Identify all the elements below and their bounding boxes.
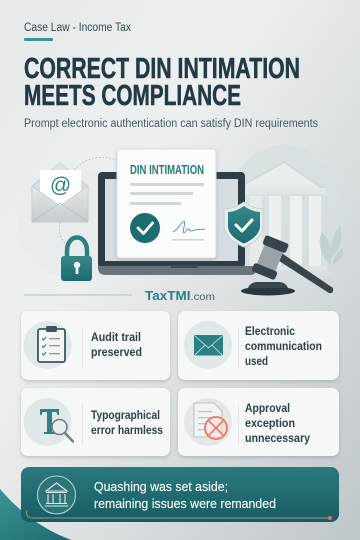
icon: plant bbox=[320, 226, 343, 265]
backdrop blobs bbox=[224, 145, 344, 291]
card text: Approval bbox=[245, 401, 290, 415]
card: audit trail bbox=[21, 311, 170, 380]
accent bar bbox=[24, 38, 53, 41]
subtitle: Prompt electronic authentication can satisfy DIN requirements bbox=[24, 118, 318, 130]
icon: mail bbox=[184, 321, 232, 369]
card text bbox=[245, 401, 310, 445]
banner text bbox=[94, 479, 276, 511]
icon: courthouse bbox=[238, 162, 332, 276]
icon: dotted connectors bbox=[59, 157, 117, 246]
category label: Case Law - Income Tax bbox=[24, 22, 131, 34]
card text: used bbox=[245, 354, 268, 368]
banner text: Quashing was set aside; bbox=[94, 479, 228, 494]
banner text: remaining issues were remanded bbox=[94, 496, 276, 511]
bottom-left teal corner bbox=[0, 489, 72, 540]
icon: clipboard bbox=[24, 321, 72, 369]
card text: communication bbox=[245, 339, 322, 353]
card text: Typographical bbox=[91, 408, 160, 422]
icon: courthouse badge bbox=[38, 476, 76, 514]
card text: Audit trail bbox=[91, 330, 141, 344]
card text: error harmless bbox=[91, 423, 163, 437]
card text: unnecessary bbox=[245, 431, 310, 445]
signature bbox=[173, 221, 205, 233]
card: approval exception bbox=[178, 388, 339, 456]
card: typographical error bbox=[21, 388, 170, 456]
brand: TaxTMI.com: TaxTMI .com bbox=[145, 289, 215, 303]
conclusion banner bbox=[21, 467, 339, 522]
icon: document with cross bbox=[184, 398, 232, 446]
document heading: DIN INTIMATION bbox=[130, 163, 204, 177]
icon: shield bbox=[224, 202, 263, 247]
icon: check badge bbox=[130, 213, 160, 243]
card text: exception bbox=[245, 416, 295, 430]
hero illustration bbox=[18, 145, 344, 296]
icon: padlock bbox=[61, 238, 92, 281]
icon: letter T with magnifier bbox=[24, 398, 73, 446]
icon: gavel bbox=[241, 235, 333, 296]
icon: envelope with @ letter: @ bbox=[50, 174, 71, 197]
brand divider line bbox=[24, 294, 132, 296]
card text: preserved bbox=[91, 345, 142, 359]
card: electronic communication bbox=[178, 311, 339, 380]
icon: envelope with @ letter bbox=[32, 163, 88, 222]
card text bbox=[91, 408, 163, 437]
card text bbox=[245, 324, 322, 368]
document: DIN intimation bbox=[117, 149, 216, 258]
title bbox=[24, 53, 300, 112]
card text bbox=[91, 330, 142, 359]
card text: Electronic bbox=[245, 324, 295, 338]
title: MEETS COMPLIANCE bbox=[24, 80, 241, 112]
icon: laptop bbox=[98, 172, 262, 275]
